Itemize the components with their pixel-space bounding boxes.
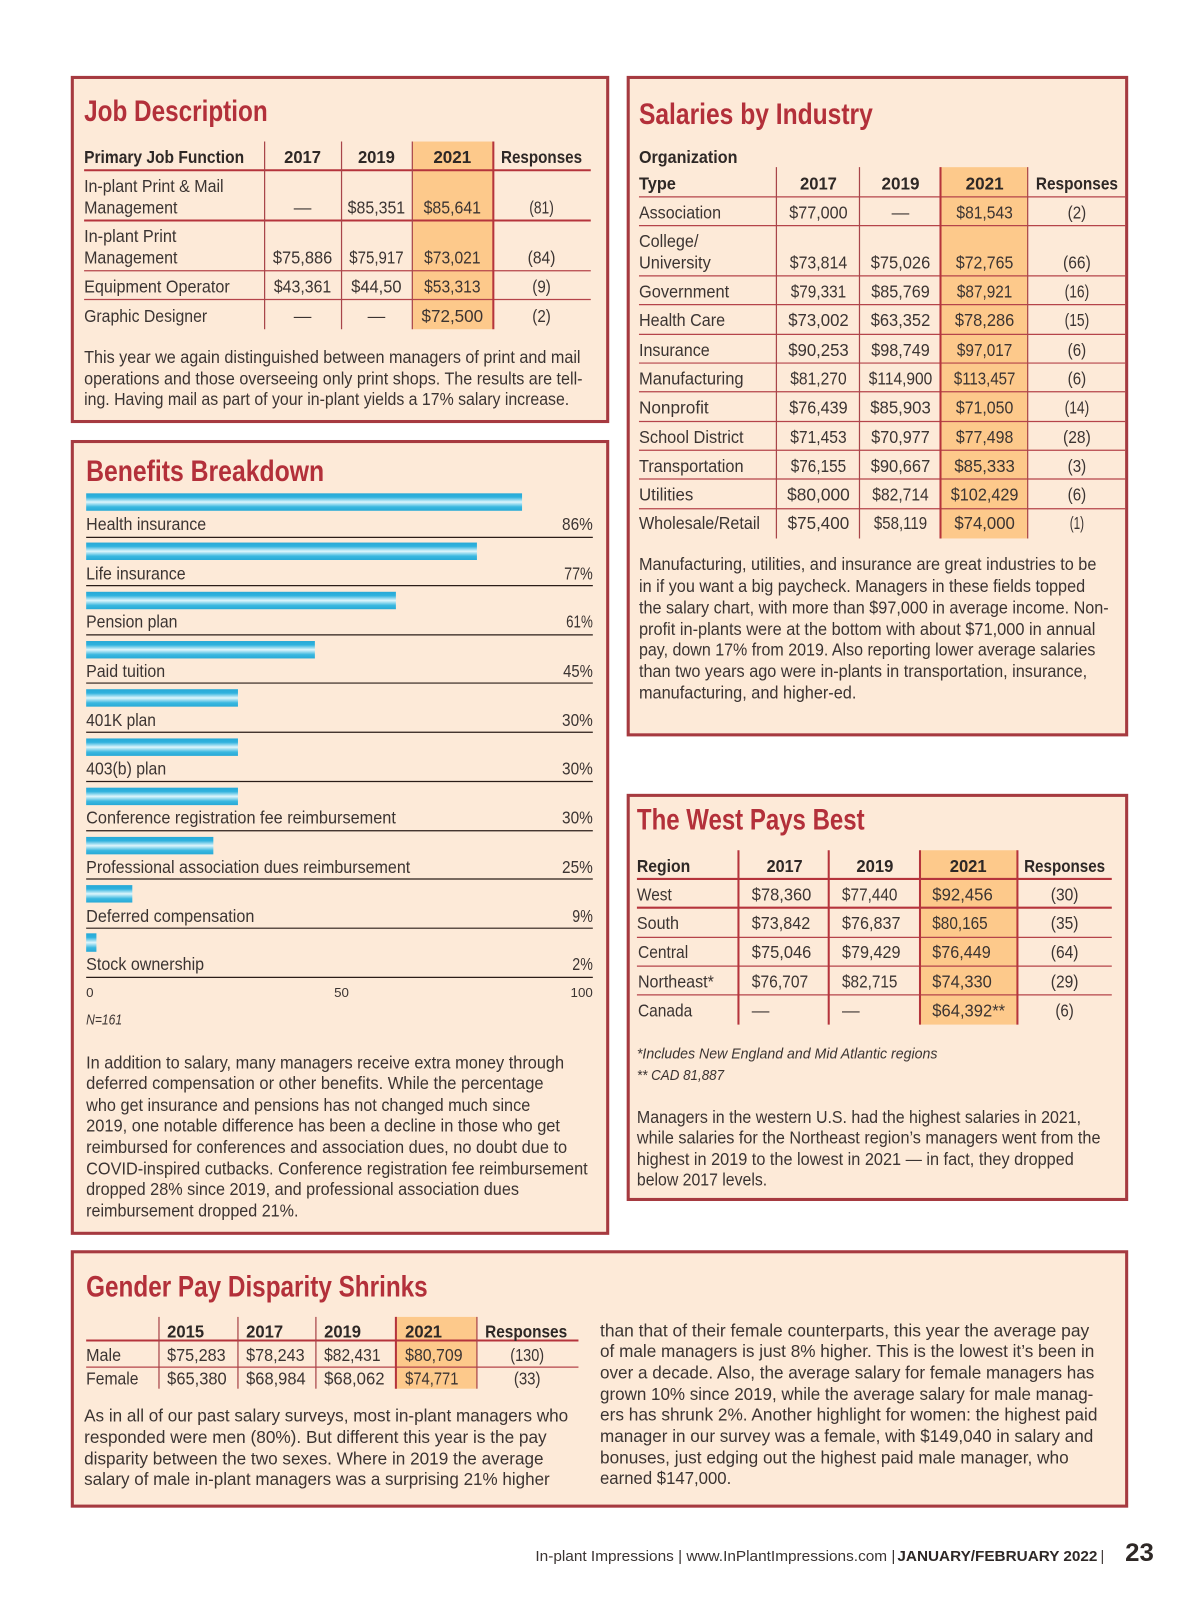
- table: salaries by organization type: $113,457: [954, 369, 1015, 389]
- text block: region commentary: highest in 2019 to the lowest in 2021 — in fact, they dropped: [637, 1149, 1074, 1169]
- page number: 23: [1125, 1540, 1154, 1567]
- table: primary job function salaries: $75,917: [349, 248, 404, 268]
- text block: industry commentary: the salary chart, with more than $97,000 in average income. Non-: [639, 597, 1109, 617]
- table: primary job function salaries: $53,313: [424, 276, 481, 296]
- table: salaries by organization type: Association: [639, 202, 721, 222]
- text block: benefits commentary: deferred compensation or other benefits. While the percentage: [86, 1073, 544, 1093]
- table: salaries by organization type: $76,155: [791, 456, 846, 476]
- table: salaries by organization type: (28): [1063, 427, 1091, 447]
- table: salaries by organization type: Wholesale/Retail: [639, 513, 760, 533]
- bar chart: benefits: Deferred compensation: [86, 906, 254, 926]
- text block: industry commentary: [639, 554, 1109, 702]
- table: salaries by region: $82,715: [842, 972, 898, 992]
- table: salaries by region: (29): [1051, 972, 1078, 992]
- table: primary job function salaries: (84): [528, 248, 555, 268]
- panel: the west pays best: [628, 795, 1127, 1199]
- text block: region commentary: while salaries for the Northeast region’s managers went from the: [636, 1128, 1101, 1148]
- table: salaries by gender: $78,243: [246, 1345, 305, 1365]
- table: primary job function salaries: 2017: [284, 147, 321, 167]
- table: salaries by region: $75,046: [752, 942, 811, 962]
- table: salaries by region: (64): [1051, 942, 1078, 962]
- footnotes: [637, 1046, 938, 1084]
- table: salaries by organization type: (1): [1070, 513, 1084, 533]
- table: salaries by region: [637, 850, 1112, 1025]
- table: salaries by organization type: [639, 147, 1125, 538]
- table: salaries by gender: $80,709: [405, 1345, 463, 1365]
- heading: benefits breakdown: Benefits Breakdown: [86, 455, 324, 488]
- text block: industry commentary: than two years ago were in-plants in transportation, insurance,: [639, 661, 1087, 681]
- table: salaries by organization type: (14): [1065, 397, 1089, 417]
- table: salaries by organization type: Government: [639, 281, 729, 301]
- bar chart: benefits: 2%: [572, 954, 593, 974]
- table: salaries by region: Responses: [1024, 856, 1105, 876]
- table: salaries by region: $76,449: [932, 942, 991, 962]
- table: salaries by region: $77,440: [842, 884, 898, 904]
- table: salaries by organization type: $76,439: [789, 397, 848, 417]
- text block: gender commentary right column: [600, 1320, 1097, 1488]
- table: salaries by region: Canada: [638, 1000, 692, 1020]
- text block: region commentary: Managers in the western U.S. had the highest salaries in 2021,: [637, 1107, 1081, 1127]
- table: salaries by gender: (33): [514, 1369, 541, 1389]
- table: salaries by region: —: [752, 1000, 770, 1020]
- table: salaries by region: (35): [1051, 913, 1078, 933]
- table: salaries by organization type: (66): [1063, 253, 1091, 273]
- table: salaries by organization type: $98,749: [871, 340, 930, 360]
- table: primary job function salaries: 2019: [358, 147, 395, 167]
- bar chart: benefits: 45%: [563, 661, 593, 681]
- table: primary job function salaries: (9): [532, 276, 551, 296]
- table: salaries by gender: $68,062: [324, 1369, 385, 1389]
- table: salaries by region: $78,360: [752, 884, 811, 904]
- table: primary job function salaries: In-plant Print: [84, 226, 176, 246]
- table: salaries by organization type: $71,050: [956, 397, 1013, 417]
- table: salaries by gender: Male: [86, 1345, 121, 1365]
- text block: benefits commentary: In addition to salary, many managers receive extra money through: [86, 1053, 564, 1073]
- text block: gender commentary left column: As in all of our past salary surveys, most in-plant managers who: [84, 1406, 568, 1426]
- text block: job description commentary: [84, 347, 583, 409]
- table: primary job function salaries: —: [294, 306, 312, 326]
- text block: industry commentary: in if you want a big paycheck. Managers in these fields topped: [639, 576, 1085, 596]
- bar chart: benefits: Paid tuition: [86, 661, 165, 681]
- bar chart: benefits: Health insurance: [86, 514, 206, 534]
- table: primary job function salaries: Primary Job Function: [84, 147, 244, 167]
- table: primary job function salaries: $44,50: [351, 276, 402, 296]
- table: salaries by organization type: $85,769: [871, 281, 930, 301]
- table: salaries by gender: $68,984: [246, 1369, 306, 1389]
- table: salaries by organization type: —: [892, 202, 910, 222]
- table: primary job function salaries: Management: [84, 197, 178, 217]
- bar chart: benefits: Life insurance: [86, 563, 186, 583]
- table: primary job function salaries: Graphic Designer: [84, 306, 207, 326]
- text block: benefits commentary: dropped 28% since 2019, and professional association dues: [86, 1179, 519, 1199]
- text block: benefits commentary: COVID-inspired cutbacks. Conference registration fee reimbursement: [86, 1158, 588, 1178]
- panel: salaries by industry: [628, 77, 1127, 735]
- footer: [535, 1540, 1154, 1567]
- table: salaries by gender: Female: [86, 1369, 139, 1389]
- text block: industry commentary: Manufacturing, utilities, and insurance are great industries to be: [639, 554, 1097, 574]
- table: salaries by organization type: (6): [1068, 485, 1086, 505]
- table: salaries by organization type: 2019: [882, 174, 920, 194]
- footer: |: [1101, 1549, 1104, 1565]
- bar chart: benefits: Stock ownership: [86, 954, 204, 974]
- footnotes: ** CAD 81,887: [637, 1068, 725, 1084]
- table: salaries by organization type: $102,429: [951, 485, 1018, 505]
- table: salaries by organization type: Health Care: [639, 310, 725, 330]
- table: salaries by gender: 2015: [167, 1321, 204, 1341]
- table: salaries by region: $73,842: [752, 913, 810, 933]
- table: salaries by organization type: (6): [1068, 369, 1086, 389]
- footer: JANUARY/FEBRUARY 2022: [897, 1549, 1097, 1565]
- table: salaries by region: South: [637, 913, 679, 933]
- table: salaries by gender: $75,283: [167, 1345, 226, 1365]
- text block: benefits commentary: reimbursed for conferences and association dues, no doubt due to: [86, 1137, 567, 1157]
- table: salaries by organization type: $80,000: [787, 485, 850, 505]
- table: salaries by region: $74,330: [932, 972, 992, 992]
- text block: industry commentary: pay, down 17% from 2019. Also reporting lower average salaries: [639, 639, 1096, 659]
- table: salaries by organization type: $81,543: [956, 202, 1013, 222]
- bar chart: benefits: 86%: [562, 514, 593, 534]
- table: salaries by organization type: $82,714: [872, 485, 929, 505]
- heading: gender pay disparity shrinks: Gender Pay Disparity Shrinks: [86, 1270, 428, 1303]
- bar chart: benefits: 401K plan: [86, 710, 156, 730]
- bar chart: benefits: 0: [86, 985, 94, 1000]
- table: salaries by organization type: $77,498: [956, 427, 1013, 447]
- table: primary job function salaries: (2): [532, 306, 551, 326]
- bar chart: benefits: 50: [334, 985, 349, 1000]
- table: salaries by organization type: Utilities: [639, 485, 693, 505]
- text block: region commentary: [636, 1107, 1101, 1190]
- table: salaries by gender: 2019: [324, 1321, 361, 1341]
- table: salaries by organization type: $77,000: [789, 202, 848, 222]
- table: salaries by region: $76,837: [842, 913, 901, 933]
- table: salaries by region: (6): [1055, 1000, 1074, 1020]
- table: salaries by region: 2019: [856, 856, 894, 876]
- table: salaries by organization type: (3): [1068, 456, 1086, 476]
- bar chart: benefits: 77%: [564, 563, 593, 583]
- footer: In-plant Impressions | www.InPlantImpressions.com |: [535, 1549, 895, 1565]
- table: salaries by organization type: $71,453: [790, 427, 847, 447]
- table: salaries by region: Region: [637, 856, 690, 876]
- table: salaries by organization type: (2): [1068, 202, 1086, 222]
- table: salaries by organization type: Responses: [1036, 174, 1118, 194]
- bar chart: benefits: N=161: [86, 1013, 122, 1029]
- bar chart: benefits: 61%: [566, 612, 593, 632]
- table: salaries by organization type: 2021: [966, 174, 1004, 194]
- table: salaries by region: $92,456: [932, 884, 993, 904]
- text block: benefits commentary: reimbursement dropped 21%.: [86, 1200, 298, 1220]
- table: salaries by organization type: $81,270: [790, 369, 847, 389]
- table: salaries by organization type: Type: [639, 174, 676, 194]
- table: salaries by region: $79,429: [842, 942, 901, 962]
- table: salaries by organization type: $73,002: [788, 310, 849, 330]
- table: primary job function salaries: $75,886: [273, 248, 332, 268]
- table: primary job function salaries: $85,641: [424, 197, 481, 217]
- table: primary job function salaries: Equipment Operator: [84, 276, 230, 296]
- text block: gender commentary right column: manager in our survey was a female, with $149,040 in salary and: [600, 1426, 1093, 1446]
- text block: gender commentary right column: over a decade. Also, the average salary for female managers has: [600, 1362, 1095, 1382]
- table: salaries by organization type: Manufacturing: [639, 369, 744, 389]
- bar chart: benefits: 9%: [572, 906, 593, 926]
- table: primary job function salaries: $85,351: [348, 197, 405, 217]
- text block: benefits commentary: 2019, one notable difference has been a decline in those who get: [86, 1115, 560, 1135]
- text block: industry commentary: manufacturing, and higher-ed.: [639, 682, 856, 702]
- table: salaries by organization type: $85,903: [870, 397, 931, 417]
- table: primary job function salaries: 2021: [433, 147, 471, 167]
- heading: the west pays best: The West Pays Best: [637, 804, 865, 837]
- text block: benefits commentary: who get insurance and pensions has not changed much since: [85, 1095, 530, 1115]
- table: salaries by gender: [86, 1317, 578, 1389]
- heading: salaries by industry: Salaries by Industry: [639, 98, 873, 131]
- table: salaries by organization type: Insurance: [639, 340, 710, 360]
- text block: gender commentary right column: of male managers is just 8% higher. This is the lowest it’s been in: [600, 1341, 1094, 1361]
- table: salaries by organization type: (15): [1065, 310, 1089, 330]
- table: primary job function salaries: In-plant Print & Mail: [84, 176, 224, 196]
- table: primary job function salaries: Management: [84, 248, 178, 268]
- text block: gender commentary left column: disparity between the two sexes. Where in 2019 the average: [84, 1449, 544, 1469]
- heading: job description: Job Description: [84, 95, 268, 128]
- table: salaries by region: Central: [638, 942, 688, 962]
- bar chart: benefits: [86, 493, 593, 1029]
- bar chart: benefits: 30%: [562, 808, 593, 828]
- table: salaries by organization type: $75,400: [788, 513, 849, 533]
- table: salaries by organization type: $63,352: [871, 310, 930, 330]
- table: salaries by organization type: $58,119: [874, 513, 927, 533]
- table: salaries by organization type: 2017: [800, 174, 837, 194]
- table: salaries by region: Northeast*: [638, 972, 714, 992]
- panel: gender pay disparity: [72, 1252, 1127, 1506]
- table: primary job function salaries: $72,500: [422, 306, 483, 326]
- table: salaries by organization type: Nonprofit: [639, 397, 709, 417]
- text block: gender commentary right column: earned $147,000.: [600, 1468, 731, 1488]
- table: salaries by organization type: $87,921: [957, 281, 1012, 301]
- table: salaries by gender: $82,431: [324, 1345, 381, 1365]
- panel: job description: [72, 77, 608, 422]
- panel: benefits breakdown: [72, 442, 608, 1233]
- table: salaries by gender: (130): [510, 1345, 544, 1365]
- table: salaries by organization type: Organization: [639, 147, 737, 167]
- bar chart: benefits: 403(b) plan: [86, 758, 166, 778]
- text block: gender commentary left column: salary of male in-plant managers was a surprising 21% higher: [84, 1469, 550, 1489]
- text block: job description commentary: This year we again distinguished between managers of print and mail: [84, 347, 581, 367]
- table: salaries by gender: $74,771: [405, 1369, 458, 1389]
- table: salaries by organization type: Transportation: [639, 456, 744, 476]
- table: salaries by region: —: [842, 1000, 860, 1020]
- text block: gender commentary right column: ers has shrunk 2%. Another highlight for women: the highest paid: [600, 1404, 1097, 1424]
- table: salaries by organization type: $90,667: [871, 456, 930, 476]
- bar chart: benefits: 30%: [562, 758, 593, 778]
- bar chart: benefits: 25%: [562, 857, 593, 877]
- table: salaries by region: $80,165: [932, 913, 988, 933]
- table: salaries by region: (30): [1051, 884, 1078, 904]
- table: salaries by organization type: $79,331: [791, 281, 846, 301]
- text block: gender commentary right column: bonuses, just edging out the highest paid male manager, who: [600, 1448, 1069, 1468]
- text block: benefits commentary: [85, 1053, 588, 1220]
- bar chart: benefits: Professional association dues reimbursement: [86, 857, 410, 877]
- table: salaries by region: $76,707: [752, 972, 808, 992]
- bar chart: benefits: 30%: [562, 710, 593, 730]
- text block: industry commentary: profit in-plants were at the bottom with about $71,000 in annual: [639, 619, 1095, 639]
- table: salaries by organization type: $72,765: [956, 253, 1013, 273]
- table: primary job function salaries: (81): [529, 197, 554, 217]
- table: salaries by organization type: $90,253: [788, 340, 849, 360]
- table: salaries by organization type: $97,017: [957, 340, 1012, 360]
- table: salaries by organization type: $70,977: [871, 427, 930, 447]
- table: salaries by region: 2021: [950, 856, 987, 876]
- table: salaries by gender: $65,380: [167, 1369, 227, 1389]
- table: salaries by organization type: $73,814: [790, 253, 847, 273]
- table: salaries by region: West: [637, 884, 672, 904]
- text block: gender commentary left column: responded were men (80%). But different this year is the pay: [84, 1427, 547, 1447]
- text block: gender commentary right column: grown 10% since 2019, while the average salary for male manag-: [600, 1384, 1093, 1404]
- text block: region commentary: below 2017 levels.: [637, 1170, 767, 1190]
- table: salaries by organization type: $85,333: [954, 456, 1015, 476]
- table: salaries by organization type: $114,900: [869, 369, 932, 389]
- bar chart: benefits: 100: [571, 985, 593, 1000]
- table: salaries by organization type: College/: [639, 231, 699, 251]
- text block: job description commentary: ing. Having mail as part of your in-plant yields a 17% salary increase.: [84, 389, 569, 409]
- bar chart: benefits: Conference registration fee reimbursement: [86, 808, 396, 828]
- table: primary job function salaries: —: [368, 306, 386, 326]
- table: primary job function salaries: $43,361: [274, 276, 331, 296]
- table: salaries by region: 2017: [767, 856, 803, 876]
- table: primary job function salaries: [84, 142, 591, 329]
- bar chart: benefits: Pension plan: [86, 612, 177, 632]
- table: primary job function salaries: —: [294, 197, 312, 217]
- table: salaries by gender: 2017: [246, 1321, 283, 1341]
- table: salaries by region: $64,392**: [932, 1000, 1005, 1020]
- table: salaries by organization type: $74,000: [954, 513, 1015, 533]
- table: salaries by organization type: (16): [1065, 281, 1089, 301]
- table: primary job function salaries: Responses: [501, 147, 582, 167]
- table: salaries by gender: 2021: [405, 1321, 442, 1341]
- text block: job description commentary: operations and those overseeing only print shops. The results are tell-: [84, 369, 583, 389]
- text block: gender commentary left column: [84, 1406, 568, 1489]
- footnotes: *Includes New England and Mid Atlantic regions: [637, 1046, 938, 1062]
- table: salaries by organization type: School District: [639, 427, 744, 447]
- table: salaries by organization type: $75,026: [871, 253, 930, 273]
- table: primary job function salaries: $73,021: [424, 248, 481, 268]
- table: salaries by organization type: (6): [1068, 340, 1086, 360]
- table: salaries by gender: Responses: [485, 1321, 567, 1341]
- table: salaries by organization type: $78,286: [955, 310, 1015, 330]
- table: salaries by organization type: University: [639, 253, 711, 273]
- text block: gender commentary right column: than that of their female counterparts, this year the average pay: [600, 1320, 1089, 1340]
